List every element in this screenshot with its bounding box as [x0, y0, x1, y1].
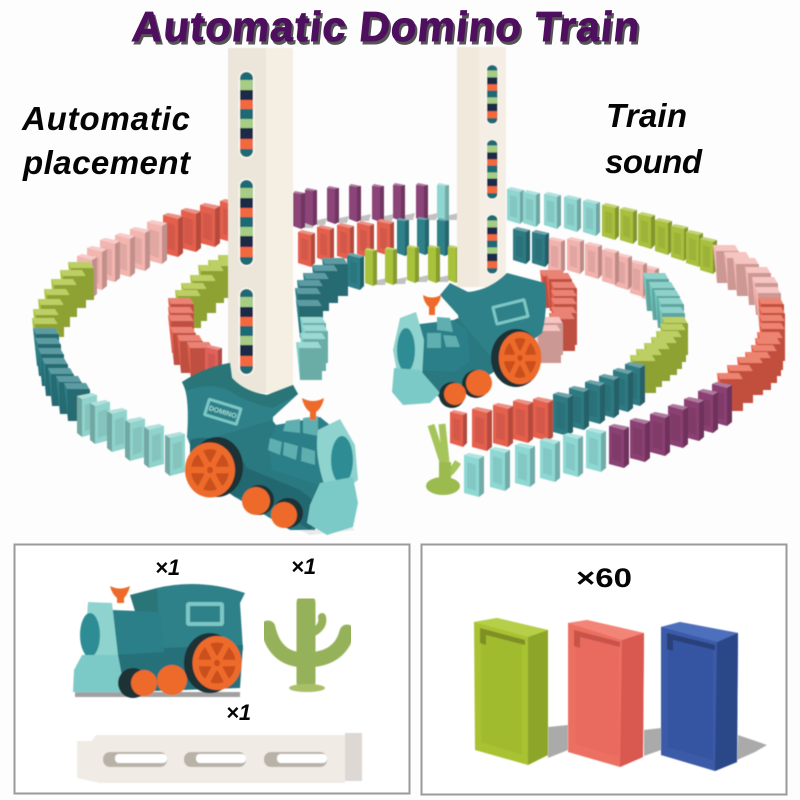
outer ring: red dominoes right curve [717, 298, 785, 411]
inner ring: red row [450, 397, 553, 451]
big wheel [185, 437, 243, 498]
boiler [412, 320, 470, 372]
outer ring: red dominoes left [163, 199, 240, 257]
panel: dominoes [422, 544, 786, 794]
outer ring: green curve left [32, 262, 94, 356]
inner ring: red curve behind right train [540, 270, 577, 351]
cow catcher [392, 368, 440, 405]
tower slot: middle [238, 178, 254, 266]
inner ring: green curve right [630, 317, 688, 393]
quantity: cactus: ×1 [291, 554, 316, 579]
running board [190, 438, 325, 530]
inner ring: pink dominoes right [548, 237, 659, 302]
chassis [190, 420, 325, 530]
domino: red [568, 620, 644, 767]
boiler face [80, 613, 100, 657]
chassis [412, 318, 500, 398]
smoke ring [84, 602, 118, 660]
smoke ring [317, 419, 358, 490]
domino: blue [661, 622, 738, 771]
label: train sound: Train [606, 97, 687, 134]
inner ring: dark teal dominoes behind tower [513, 227, 549, 267]
cactus: panel [268, 603, 347, 692]
cab [182, 363, 298, 497]
inner ring: red curve left [168, 298, 213, 380]
cab plate: DOMINO [208, 405, 238, 420]
tower slot: middle [486, 139, 499, 200]
chimney [302, 398, 324, 420]
boiler panels [268, 416, 318, 465]
train: panel [73, 584, 245, 698]
boiler face [331, 436, 353, 484]
inner ring: pink curve behind right train [535, 317, 563, 363]
tower part [77, 733, 362, 783]
label: automatic placement: Automatic [21, 100, 190, 137]
cow catcher [307, 477, 358, 535]
title: Automatic Domino Train [132, 6, 644, 53]
cactus: on track [426, 424, 460, 495]
inner ring: green curve left [175, 255, 244, 328]
quantity: dominoes: ×60 [576, 563, 632, 593]
outer ring: pink dominoes right [713, 245, 781, 325]
domino shadows [548, 725, 767, 760]
outer ring: pink dominoes left [77, 220, 167, 298]
small wheels [439, 370, 492, 408]
outer ring: dark teal curve left [33, 328, 90, 421]
tower slot: lower [486, 214, 499, 275]
boiler panels [427, 317, 460, 348]
inner ring: pale teal curve right [643, 273, 685, 345]
cab [440, 273, 546, 367]
tower slot: upper [238, 70, 254, 158]
train shadow [190, 470, 355, 535]
centre row: red dominoes [298, 219, 394, 267]
back row: purple dominoes [293, 183, 438, 229]
cab [157, 584, 245, 680]
label: automatic placement [21, 100, 192, 181]
centre row: teal dominoes [397, 217, 459, 256]
chassis [112, 645, 243, 692]
inner ring: pink-red domino [205, 345, 222, 382]
boiler face [397, 328, 415, 372]
tower: left [228, 48, 293, 393]
cab plate [491, 298, 530, 326]
inner ring: pale teal curve centre [296, 317, 328, 380]
back row: pale teal domino [437, 183, 459, 221]
tower slot: lower [238, 288, 254, 376]
inner ring: dark teal curve centre [295, 253, 364, 338]
back row: pale teal dominoes right of tower [507, 187, 600, 236]
quantity: tower: ×1 [226, 700, 251, 725]
domino: green [474, 618, 548, 765]
smoke ring [393, 312, 424, 378]
tower slot: upper [486, 64, 499, 125]
big wheel [184, 633, 242, 693]
cow catcher [73, 655, 125, 692]
tower: right [457, 47, 506, 287]
centre row: green dominoes [365, 245, 470, 286]
boiler [270, 417, 336, 485]
label: train sound: sound [605, 143, 703, 180]
label: train sound [605, 97, 703, 180]
big wheel [491, 329, 541, 387]
chimney [110, 586, 130, 603]
cab plate [186, 602, 224, 626]
train: back right [392, 273, 546, 408]
title: Automatic Domino Train [130, 3, 642, 50]
outer ring: purple row [609, 382, 732, 468]
cab roof highlight [182, 363, 298, 408]
panel: train, cactus and tower parts [14, 544, 410, 794]
small wheels [118, 665, 187, 698]
domino track [32, 183, 785, 497]
quantity: train: ×1 [155, 555, 180, 580]
outer ring: pale teal row left [77, 393, 185, 476]
cab plate [203, 397, 243, 426]
train: front left [182, 363, 358, 535]
inner ring: dark teal row [553, 362, 645, 436]
small wheels [242, 485, 303, 528]
boiler [112, 610, 164, 655]
chimney [423, 295, 441, 315]
outer ring: green dominoes top right [602, 203, 717, 274]
label: automatic placement: placement [22, 144, 192, 181]
base shadow [75, 692, 240, 697]
outer ring: pale teal row [464, 428, 606, 497]
